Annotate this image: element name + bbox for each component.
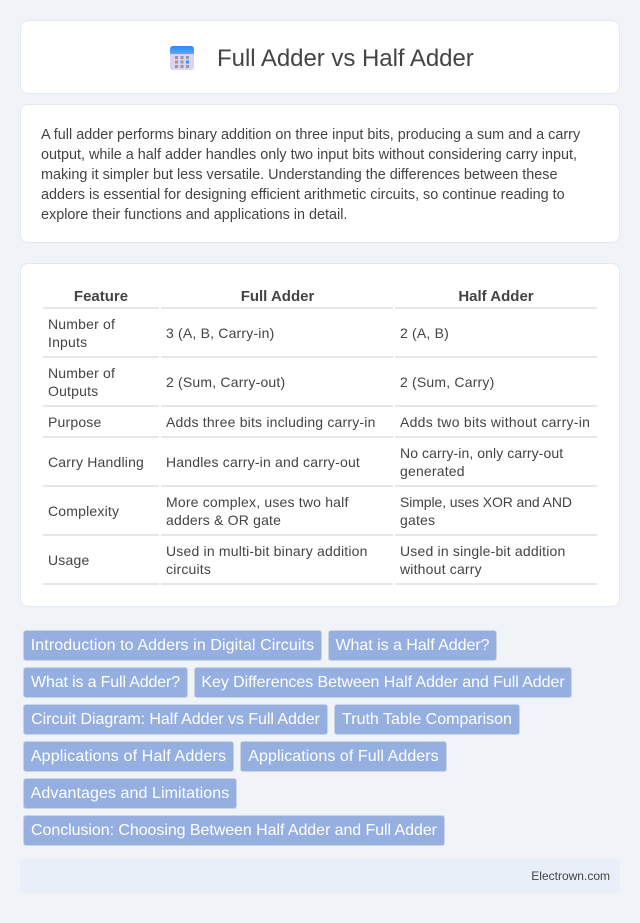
text block: introduction bbox=[41, 127, 580, 223]
tag bbox=[23, 704, 328, 735]
tag: Truth Table Comparison bbox=[342, 711, 512, 728]
text: 2 (A, B) bbox=[400, 325, 449, 341]
tag: What is a Half Adder? bbox=[335, 637, 490, 654]
text: gates bbox=[400, 512, 435, 528]
tag bbox=[23, 667, 188, 698]
footer bbox=[20, 859, 620, 893]
text: Inputs bbox=[48, 334, 87, 350]
text: circuits bbox=[166, 561, 211, 577]
panel: title card bbox=[20, 20, 620, 94]
tag: Applications of Half Adders bbox=[31, 748, 226, 765]
tag bbox=[328, 630, 497, 661]
tag: Applications of Full Adders bbox=[248, 748, 439, 765]
text: Half Adder bbox=[458, 288, 534, 305]
text: output, while a half adder handles only two input bits without considering carry input, bbox=[41, 147, 577, 163]
icon: calendar bbox=[170, 46, 194, 70]
text: explore their functions and applications in detail. bbox=[41, 207, 347, 223]
row: carry handling bbox=[48, 445, 564, 479]
tag: Introduction to Adders in Digital Circuits bbox=[31, 637, 314, 654]
text: Full Adder bbox=[241, 288, 314, 305]
tag: What is a Full Adder? bbox=[31, 674, 180, 691]
text: generated bbox=[400, 463, 465, 479]
text: Used in single-bit addition bbox=[400, 543, 565, 559]
text: Number of bbox=[48, 316, 115, 332]
text: 3 (A, B, Carry-in) bbox=[166, 325, 274, 341]
row: complexity bbox=[48, 494, 572, 528]
tag bbox=[23, 815, 445, 846]
tag list bbox=[23, 630, 572, 846]
panel: introduction bbox=[20, 104, 620, 243]
text: adders is essential for designing efficient arithmetic circuits, so continue reading to bbox=[41, 187, 565, 203]
text: Used in multi-bit binary addition bbox=[166, 543, 368, 559]
text: Complexity bbox=[48, 503, 119, 519]
tag bbox=[240, 741, 447, 772]
text: Simple, uses XOR and AND bbox=[400, 494, 572, 510]
tag bbox=[23, 630, 322, 661]
text: Handles carry-in and carry-out bbox=[166, 454, 360, 470]
row: usage bbox=[48, 543, 565, 577]
text: Feature bbox=[74, 288, 128, 305]
text: No carry-in, only carry-out bbox=[400, 445, 563, 461]
tag: Circuit Diagram: Half Adder vs Full Adder bbox=[31, 711, 320, 728]
text: Usage bbox=[48, 552, 89, 568]
text: adders & OR gate bbox=[166, 512, 281, 528]
panel: comparison table bbox=[20, 263, 620, 607]
tag bbox=[334, 704, 520, 735]
text: Adds two bits without carry-in bbox=[400, 414, 590, 430]
text: 2 (Sum, Carry-out) bbox=[166, 374, 285, 390]
tag bbox=[23, 741, 234, 772]
tag: Key Differences Between Half Adder and Full Adder bbox=[201, 674, 565, 691]
text: making it simpler but less versatile. Understanding the differences between these bbox=[41, 167, 557, 183]
text: Carry Handling bbox=[48, 454, 144, 470]
row: number of inputs bbox=[48, 316, 449, 350]
text: 2 (Sum, Carry) bbox=[400, 374, 494, 390]
comparison table bbox=[43, 288, 597, 585]
tag bbox=[194, 667, 572, 698]
row: number of outputs bbox=[48, 365, 494, 399]
row: purpose bbox=[48, 414, 590, 430]
text: without carry bbox=[400, 561, 482, 577]
text: More complex, uses two half bbox=[166, 494, 349, 510]
text: Number of bbox=[48, 365, 115, 381]
table header bbox=[74, 288, 534, 305]
text: Adds three bits including carry-in bbox=[166, 414, 376, 430]
text: A full adder performs binary addition on three input bits, producing a sum and a carry bbox=[41, 127, 580, 143]
text: Purpose bbox=[48, 414, 101, 430]
tag: Advantages and Limitations bbox=[31, 785, 229, 802]
title: Full Adder vs Half Adder bbox=[217, 45, 474, 72]
text: Outputs bbox=[48, 383, 98, 399]
footer credit: Electrown.com bbox=[531, 869, 610, 883]
tag bbox=[23, 778, 237, 809]
tag: Conclusion: Choosing Between Half Adder and Full Adder bbox=[31, 822, 437, 839]
